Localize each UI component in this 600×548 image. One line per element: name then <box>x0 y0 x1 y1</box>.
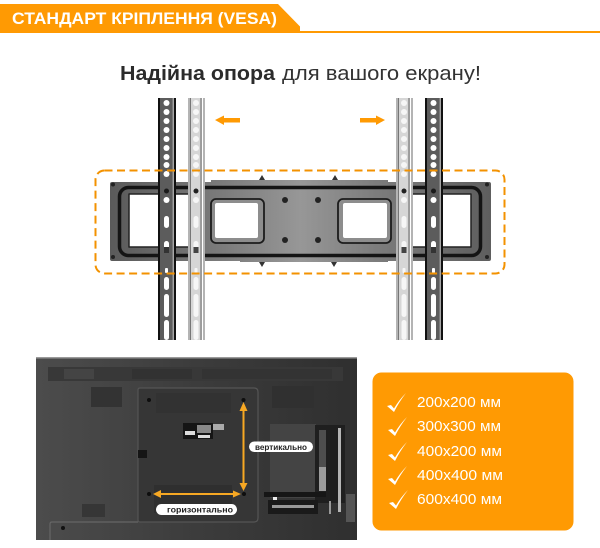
header title: СТАНДАРТ КРІПЛЕННЯ (VESA) <box>12 10 277 28</box>
panel: VESA sizes <box>372 372 574 530</box>
icon: arrow right <box>360 116 385 125</box>
size 400x400: 400x400 мм <box>417 468 503 484</box>
size 400x200 <box>388 442 502 461</box>
heading: для вашого екрану! <box>282 63 481 85</box>
label: vertical: вертикально <box>255 442 307 452</box>
header banner <box>0 4 600 33</box>
size 600x400 <box>389 490 502 509</box>
size 200x200 <box>387 393 501 412</box>
size 300x300 <box>388 417 501 436</box>
size 400x400 <box>388 466 503 485</box>
label: horizontal: горизонтально <box>167 504 233 514</box>
vent strip <box>48 367 343 381</box>
size 400x200: 400x200 мм <box>417 444 502 460</box>
sticker labels <box>183 423 224 439</box>
left light rail <box>188 98 205 340</box>
wall bracket <box>110 98 491 340</box>
connector panel <box>264 424 355 522</box>
mounting holes <box>147 398 246 496</box>
side latch <box>138 450 147 458</box>
size 600x400: 600x400 мм <box>417 492 502 508</box>
size 300x300: 300x300 мм <box>417 419 501 435</box>
dashed highlight frame <box>96 170 504 274</box>
lower ledge <box>50 522 138 540</box>
heading: Надійна опора <box>120 63 276 85</box>
left dark rail <box>158 98 176 340</box>
right light rail <box>396 98 413 340</box>
right dark rail <box>425 98 443 340</box>
mounting plate <box>110 175 491 267</box>
dimension arrows <box>153 402 248 498</box>
heading <box>120 63 481 85</box>
TV back photo <box>36 357 357 540</box>
size 200x200: 200x200 мм <box>417 395 501 411</box>
raised mount panel <box>138 388 258 522</box>
icon: arrow left <box>215 116 240 125</box>
